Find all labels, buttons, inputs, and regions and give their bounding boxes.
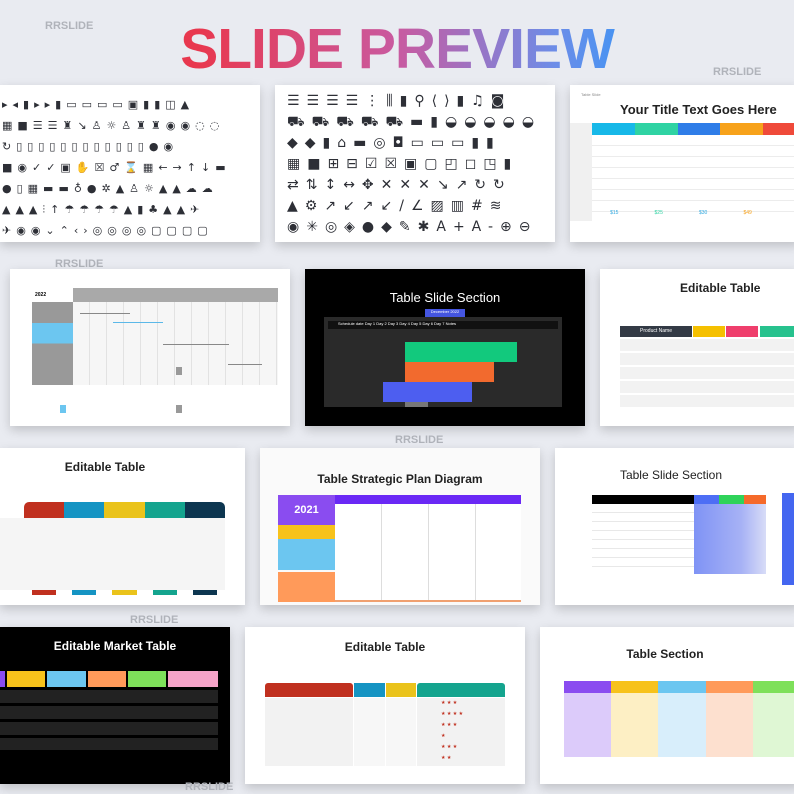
panel: gantt slide: 2022	[35, 292, 46, 298]
heading: Editable Table	[65, 460, 145, 474]
panel: gantt slide	[10, 269, 290, 426]
panel: dark schedule slide: Schedule date Day 1 Day 2 Day 3 Day 4 Day 5 Day 6 Day 7 Notes	[338, 321, 456, 326]
panel: strategic plan	[260, 448, 540, 605]
watermark: RRSLIDE	[55, 258, 103, 270]
panel: pricing table slide: $15	[610, 210, 618, 216]
panel: editable table stars: ★ ★ ★ ★	[441, 711, 463, 717]
heading: Editable Market Table	[54, 639, 176, 653]
panel: dark schedule slide	[305, 269, 585, 426]
panel: icon slide 2: ☰☰☰☰⋮⫼▮⚲⟨⟩▮♫◙ ⛟⛟⛟⛟⛟▬▮◒◒◒◒◒ ◆◆▮⌂▬◎◘▭▭▭▮▮ ▦■⊞⊟☑☒▣▢◰◻◳▮ ⇄⇅↕↔✥✕✕✕↘↗↻↻ ▲⚙↗↙↗↙/∠▨▥#≋ ◉✳◎◈●◆✎✱A+A-⊕⊖	[287, 93, 541, 235]
panel: pricing table slide: $30	[699, 210, 707, 216]
panel: pricing table slide: $25	[655, 210, 663, 216]
heading: Editable Table	[680, 281, 760, 295]
panel: pricing table slide	[570, 85, 794, 242]
panel: editable table stars: ★ ★ ★	[441, 700, 457, 706]
watermark: RRSLIDE	[713, 66, 761, 78]
title: SLIDE PREVIEW	[180, 17, 614, 81]
heading: Table Section	[626, 647, 704, 661]
watermark: RRSLIDE	[45, 20, 93, 32]
panel: strategic plan: 2021	[294, 504, 319, 516]
panel: editable table stars: ★ ★ ★	[441, 722, 457, 728]
watermark: RRSLIDE	[395, 434, 443, 446]
panel: editable checklist table: Product Name	[640, 328, 672, 334]
panel: table section pastel	[540, 627, 794, 784]
panel: editable table stars: ★	[441, 733, 445, 739]
panel: editable table stars: ★ ★ ★	[441, 744, 457, 750]
panel: dark market table	[0, 627, 230, 784]
watermark: RRSLIDE	[130, 614, 178, 626]
panel: pricing table slide: $49	[743, 210, 752, 216]
panel: editable table stars: ★ ★	[441, 755, 451, 761]
panel: table slide section value	[555, 448, 794, 605]
title	[0, 16, 794, 82]
panel: editable table ABCDE	[0, 448, 245, 605]
heading: Table Strategic Plan Diagram	[317, 472, 483, 486]
heading: Table Slide Section	[620, 468, 722, 482]
panel: editable checklist table	[600, 269, 794, 426]
panel: editable table stars	[245, 627, 525, 784]
panel: pricing table slide: Table Slide	[581, 92, 601, 97]
table header	[592, 123, 794, 135]
heading: Your Title Text Goes Here	[620, 102, 777, 117]
heading: Editable Table	[345, 640, 425, 654]
panel: icon slide 1: ▸◂▮▸▸▮▭▭▭▭▣▮▮◫▲ ▦■☰☰♜↘♙☼♙♜♜◉◉◌◌ ↻▯▯▯▯▯▯▯▯▯▯▯▯●◉ ■◉✓✓▣✋☒♂⌛▦←→↑↓▬ ●▯▦▬▬♁●✲▲♙☼▲▲☁☁ ▲▲▲⫶↑☂☂☂☂▲▮♣▲▲✈ ✈◉◉⌄⌃‹›◎◎◎◎▢▢▢▢	[2, 98, 231, 237]
watermark: RRSLIDE	[185, 781, 233, 793]
panel: dark schedule slide: December 2022	[431, 309, 459, 314]
heading: Table Slide Section	[390, 290, 500, 305]
